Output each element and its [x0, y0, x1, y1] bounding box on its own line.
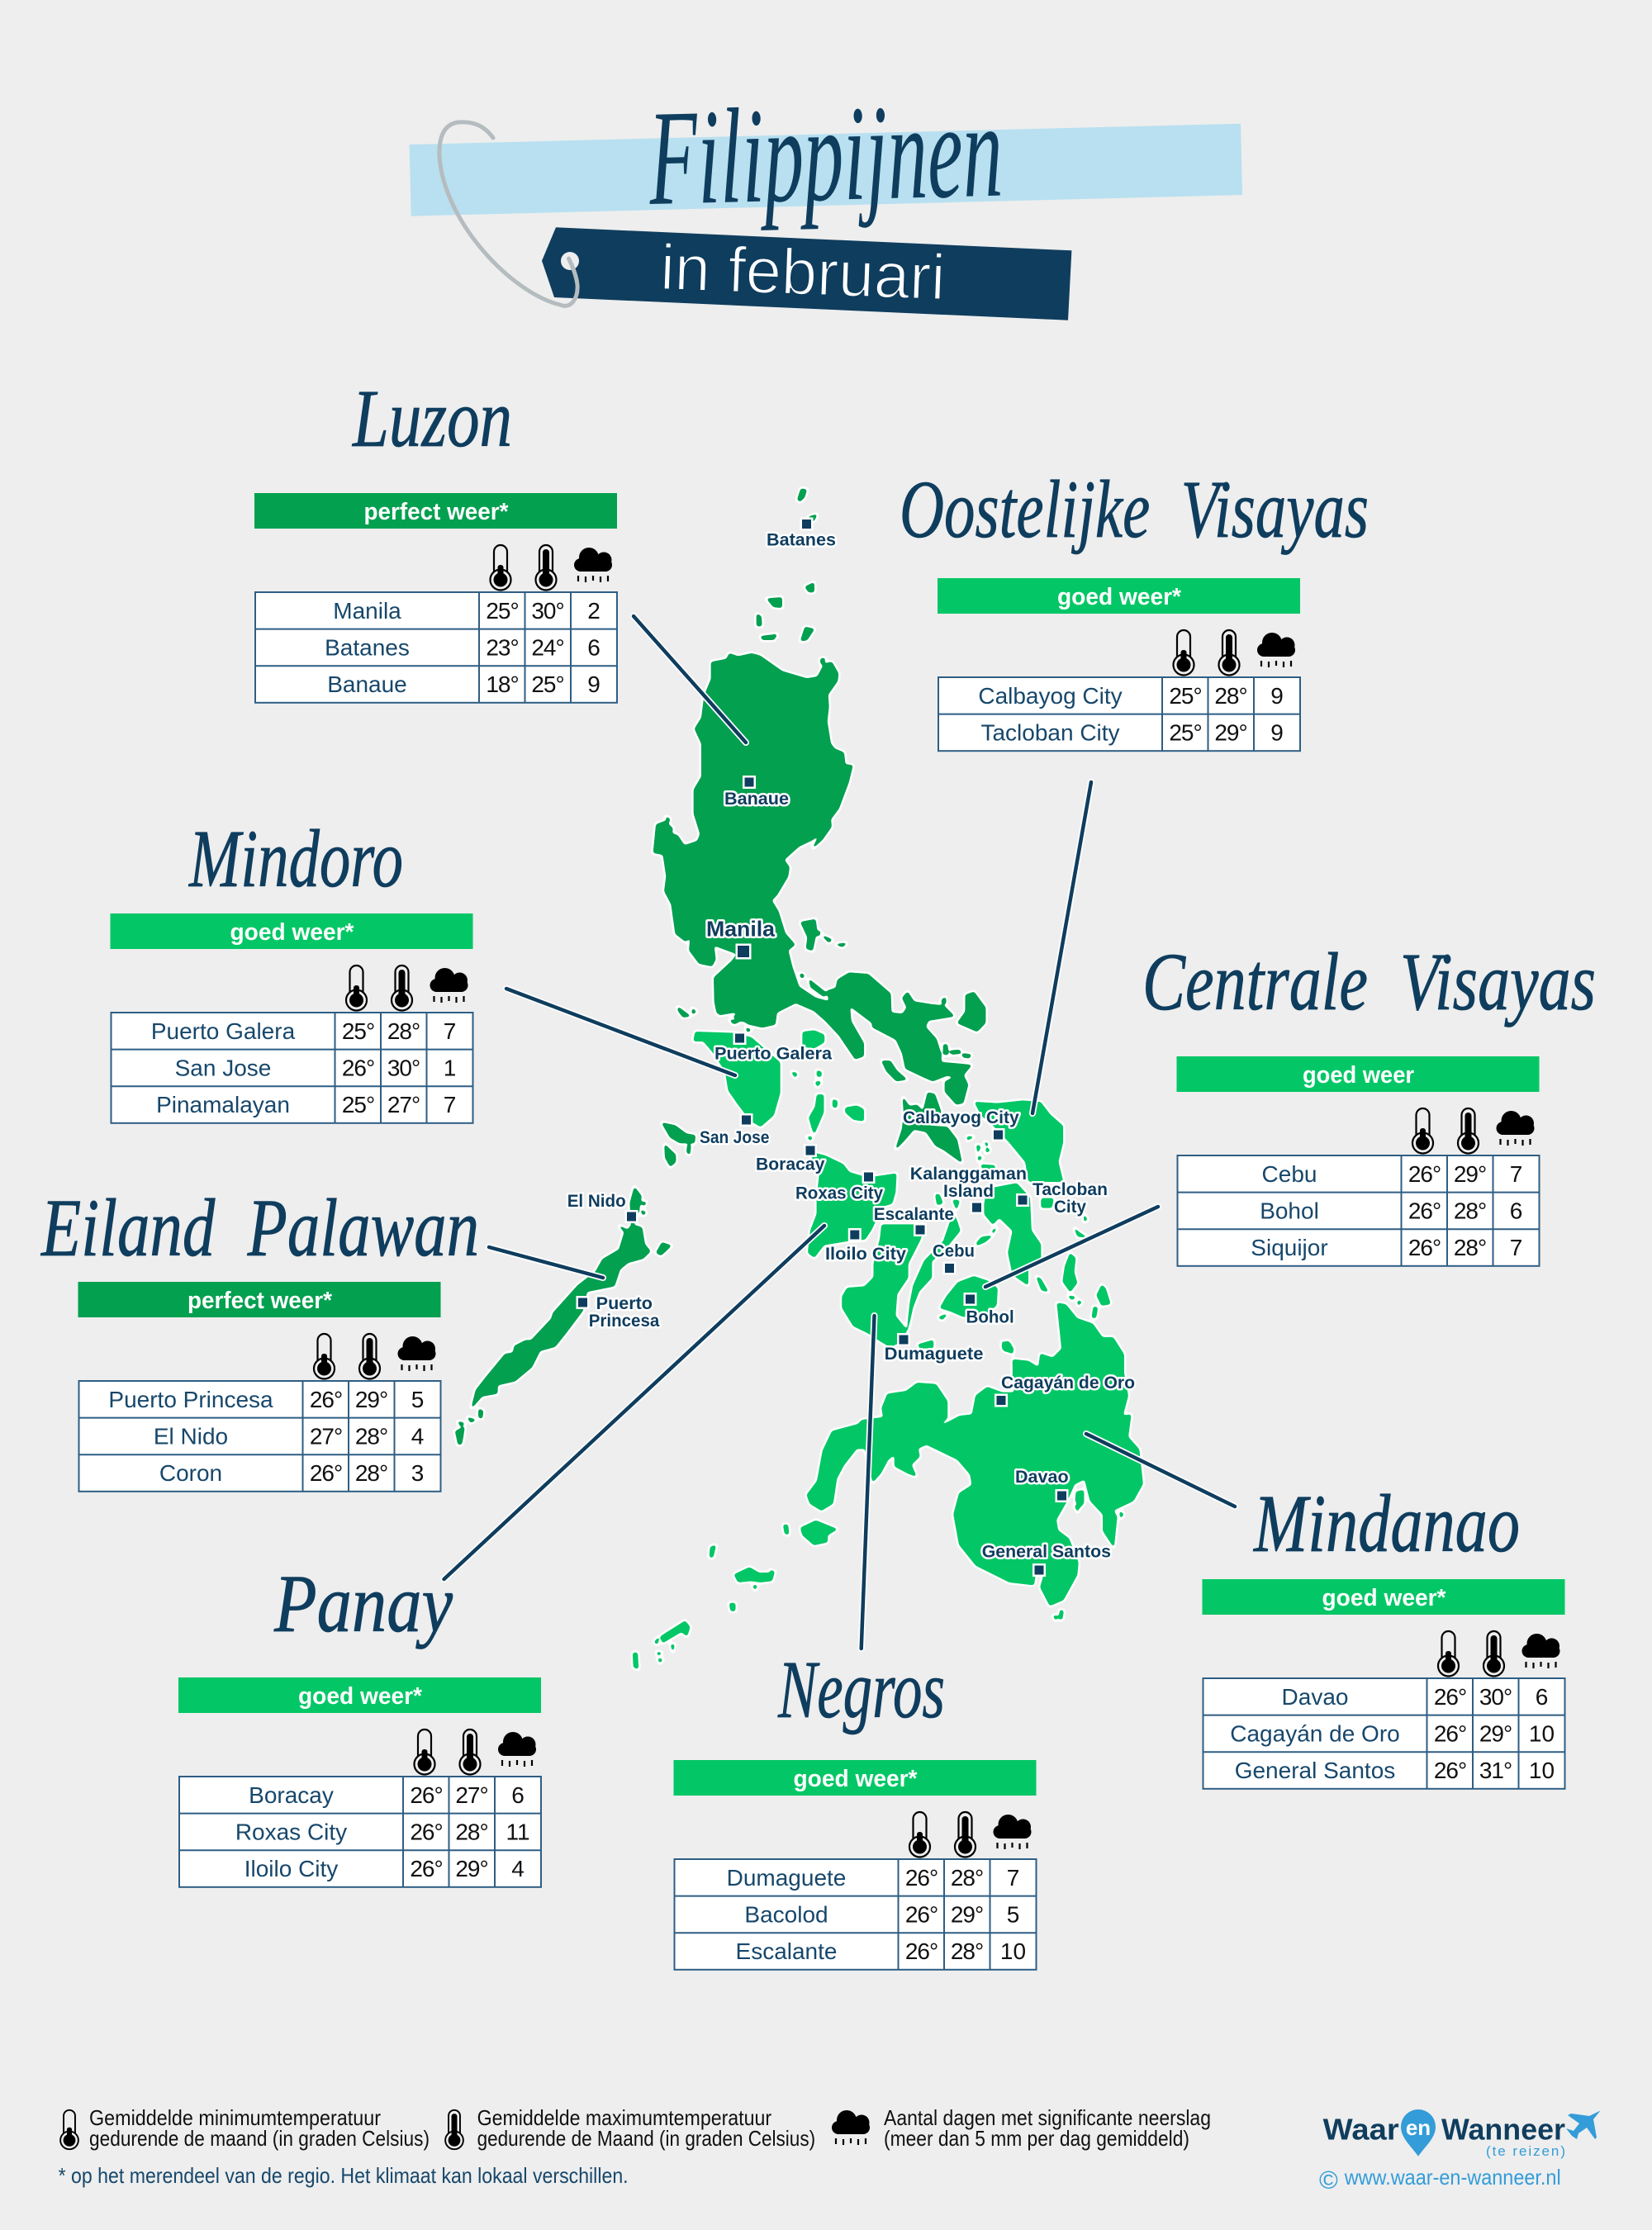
tag hole [561, 252, 579, 270]
city labels: Batanes [767, 530, 836, 550]
city labels: Tacloban [1032, 1179, 1108, 1199]
panel: Negros: Escalante [736, 1938, 837, 1964]
panel: Luzon: 25° [486, 598, 519, 624]
tag string [439, 122, 577, 306]
city labels: El Nido [567, 1191, 626, 1211]
panel: Mindoro: 7 [444, 1092, 456, 1117]
legend text: minimum temperature: Gemiddelde minimumtemperatuur [89, 2105, 381, 2130]
panel: Negros [674, 1760, 1036, 1970]
panel: Panay: 6 [511, 1782, 525, 1808]
city labels: Island [943, 1181, 994, 1201]
logo: Waar en Wanneer: Wanneer [1441, 2113, 1565, 2147]
panel: Centrale Visayas: Bohol [1260, 1198, 1319, 1224]
heading: Negros: Negros [777, 1644, 945, 1735]
panel: Mindanao: 26° [1434, 1684, 1466, 1710]
panel: Mindoro: goed weer* [230, 919, 354, 946]
panel: Mindanao: 31° [1479, 1758, 1512, 1783]
panel: Mindoro: 25° [342, 1018, 374, 1044]
legend text: rain days [884, 2105, 1211, 2151]
panel: Negros: 28° [951, 1938, 983, 1964]
panel: Centrale Visayas: 29° [1454, 1161, 1486, 1187]
panel: Oostelijke Visayas: 28° [1214, 683, 1247, 709]
city labels: San Jose [700, 1127, 770, 1147]
panel: Luzon: perfect weer* [363, 499, 509, 525]
city labels: Iloilo City [825, 1244, 906, 1264]
title block [410, 74, 1242, 320]
panel: Mindanao: 6 [1536, 1684, 1548, 1710]
legend text: maximum temperature: Gemiddelde maximumtemperatuur [477, 2105, 771, 2130]
panel: Oostelijke Visayas: 25° [1169, 683, 1202, 709]
panel: Negros: Dumaguete [727, 1865, 846, 1891]
panel: Panay: 26° [410, 1820, 443, 1845]
panel: Mindoro: 27° [387, 1092, 420, 1117]
panel: Centrale Visayas: 26° [1408, 1198, 1441, 1224]
panel: Negros: 26° [905, 1902, 938, 1928]
logo: Waar en Wanneer: Waar [1323, 2113, 1399, 2147]
logo: Waar en Wanneer [1319, 2109, 1601, 2194]
panel: Negros: Bacolod [744, 1902, 828, 1928]
panel: Mindoro: 30° [387, 1056, 420, 1081]
panel: Centrale Visayas: 26° [1408, 1161, 1441, 1187]
panel: Eiland Palawan: 26° [310, 1387, 342, 1412]
city labels: Manila [706, 916, 776, 941]
panel: Oostelijke Visayas [938, 578, 1300, 751]
panel: Eiland Palawan: 28° [355, 1424, 387, 1450]
logo: Waar en Wanneer: (te reizen) [1486, 2143, 1565, 2159]
panel: Luzon: 2 [587, 598, 601, 624]
city labels: General Santos [982, 1542, 1111, 1562]
panel: Luzon: Banaue [327, 671, 407, 697]
city labels: Roxas City [795, 1184, 883, 1203]
connector lines [444, 616, 1235, 1649]
footnote: * op het merendeel van de regio. Het klimaat kan lokaal verschillen. [59, 2163, 629, 2188]
panel: Negros: 28° [951, 1865, 983, 1891]
city labels: Puerto [596, 1293, 653, 1313]
panel: Mindoro: Pinamalayan [156, 1092, 290, 1117]
panel: Negros: 29° [951, 1902, 983, 1928]
panel: Luzon: 6 [587, 635, 601, 661]
panel: Centrale Visayas: Cebu [1262, 1161, 1317, 1187]
panel: Mindanao [1203, 1579, 1564, 1789]
panel: Mindoro: 26° [342, 1056, 374, 1081]
panel: Eiland Palawan: 3 [411, 1460, 424, 1486]
panel: Eiland Palawan: 28° [355, 1460, 387, 1486]
icon: location pin [1401, 2109, 1436, 2156]
panel: Oostelijke Visayas: 9 [1270, 720, 1284, 746]
city labels: Banaue [724, 789, 789, 809]
panel: Negros: 26° [905, 1938, 938, 1964]
panel: Eiland Palawan: 29° [355, 1387, 387, 1412]
panel: Centrale Visayas: 6 [1510, 1198, 1522, 1224]
city labels: Davao [1015, 1467, 1069, 1487]
panel: Mindanao: 10 [1529, 1758, 1555, 1783]
panel: Negros: 26° [905, 1865, 938, 1891]
heading: Mindoro: Mindoro [188, 813, 403, 904]
heading: Panay: Panay [273, 1558, 453, 1649]
panel: Panay [178, 1677, 541, 1887]
heading: Eiland Palawan: Eiland Palawan [40, 1182, 479, 1274]
panel: Mindoro: 1 [444, 1056, 456, 1081]
panel: Mindoro: 7 [444, 1018, 456, 1044]
panel: Luzon [254, 493, 617, 703]
heading: Mindanao: Mindanao [1252, 1478, 1520, 1569]
legend text: minimum temperature: gedurende de maand (in graden Celsius) [89, 2126, 430, 2151]
panel: Centrale Visayas: goed weer [1303, 1062, 1414, 1089]
panel: Centrale Visayas: 7 [1510, 1161, 1522, 1187]
city labels: Calbayog City [903, 1108, 1019, 1127]
heading: Oostelijke Visayas: Oostelijke Visayas [900, 463, 1369, 555]
panel: Panay: Roxas City [235, 1820, 347, 1845]
city labels: Cagayán de Oro [1001, 1373, 1135, 1393]
city labels: Bohol [966, 1307, 1014, 1327]
panel: Mindanao: 26° [1434, 1721, 1466, 1747]
panel: Panay: 26° [410, 1856, 443, 1881]
panel: Luzon: Manila [333, 598, 401, 624]
legend text: rain days: Aantal dagen met significante neerslag [884, 2105, 1211, 2130]
panel: Centrale Visayas [1176, 1056, 1540, 1266]
panel: Panay: goed weer* [298, 1683, 423, 1710]
map of the Philippines [456, 489, 1142, 1668]
panel: Mindanao: goed weer* [1322, 1585, 1446, 1611]
panel: Oostelijke Visayas: 9 [1270, 683, 1284, 709]
panel: Mindanao: 10 [1529, 1721, 1555, 1747]
panel: Centrale Visayas: 28° [1454, 1235, 1486, 1260]
panel: Luzon: 25° [531, 671, 564, 697]
city labels [567, 530, 1135, 1562]
logo: Waar en Wanneer: © [1319, 2166, 1338, 2194]
panel: Luzon: 18° [486, 671, 519, 697]
panel: Negros: 10 [1000, 1938, 1026, 1964]
legend text: rain days: (meer dan 5 mm per dag gemiddeld) [884, 2126, 1189, 2151]
panel: Panay: 27° [455, 1782, 488, 1808]
city labels: Cebu [933, 1241, 975, 1261]
panel: Centrale Visayas: 28° [1454, 1198, 1486, 1224]
panel: Eiland Palawan [78, 1282, 441, 1492]
panel: Luzon: 9 [587, 671, 601, 697]
panel: Negros: goed weer* [793, 1766, 918, 1792]
panel: Luzon: 24° [531, 635, 564, 661]
icon: rain cloud [832, 2110, 870, 2145]
icon: maximum temperature [445, 2110, 463, 2149]
legend text: maximum temperature [477, 2105, 815, 2151]
logo: Waar en Wanneer: www.waar-en-wanneer.nl [1344, 2165, 1561, 2190]
panel: Centrale Visayas: 7 [1510, 1235, 1522, 1260]
legend [60, 2105, 1211, 2151]
panel: Eiland Palawan: El Nido [154, 1424, 228, 1450]
panel: Mindanao: Cagayán de Oro [1230, 1721, 1400, 1747]
panel: Centrale Visayas: Siquijor [1251, 1235, 1328, 1260]
panel: Panay: Boracay [249, 1782, 334, 1808]
panel: Mindanao: General Santos [1235, 1758, 1395, 1783]
city markers [578, 520, 1066, 1574]
panel: Luzon: 23° [486, 635, 519, 661]
title banner: light blue [410, 124, 1242, 216]
panel: Mindoro: San Jose [175, 1056, 271, 1081]
panel: Mindoro: Puerto Galera [151, 1018, 296, 1044]
subheading: in februari: in februari [659, 230, 947, 314]
panel: Panay: Iloilo City [244, 1856, 338, 1881]
city labels: Kalanggaman [910, 1164, 1027, 1184]
city labels: Puerto Galera [714, 1044, 833, 1064]
panel: Oostelijke Visayas: Calbayog City [978, 683, 1123, 709]
luggage tag: navy [542, 227, 1071, 320]
logo: Waar en Wanneer: en [1406, 2115, 1431, 2140]
panel: Mindanao: Davao [1282, 1684, 1348, 1710]
panel: Eiland Palawan: Coron [159, 1460, 222, 1486]
panel: Mindoro [111, 913, 472, 1123]
panel: Eiland Palawan: perfect weer* [188, 1288, 333, 1314]
icon: minimum temperature [60, 2110, 78, 2149]
panel: Oostelijke Visayas: goed weer* [1057, 584, 1182, 610]
heading: Luzon: Luzon [351, 372, 512, 464]
city labels: Princesa [589, 1311, 660, 1331]
panel: Negros: 7 [1007, 1865, 1019, 1891]
panel: Oostelijke Visayas: 29° [1214, 720, 1247, 746]
panel: Oostelijke Visayas: 25° [1169, 720, 1202, 746]
panel: Panay: 11 [506, 1820, 530, 1845]
panel: Mindanao: 29° [1479, 1721, 1512, 1747]
panel: Eiland Palawan: 26° [310, 1460, 342, 1486]
panel: Mindoro: 25° [342, 1092, 374, 1117]
panel: Panay: 29° [455, 1856, 488, 1881]
panel: Panay: 28° [455, 1820, 488, 1845]
city labels: Dumaguete [885, 1344, 984, 1364]
panel: Mindanao: 26° [1434, 1758, 1466, 1783]
city labels: City [1054, 1197, 1086, 1217]
panel: Luzon: 30° [531, 598, 564, 624]
panel: Mindanao: 30° [1479, 1684, 1512, 1710]
panel: Negros: 5 [1007, 1902, 1019, 1928]
panel: Panay: 26° [410, 1782, 443, 1808]
city labels: Escalante [874, 1204, 954, 1224]
city labels: Boracay [756, 1155, 824, 1174]
panel: Eiland Palawan: 27° [310, 1424, 342, 1450]
legend text: maximum temperature: gedurende de Maand (in graden Celsius) [477, 2126, 815, 2151]
panel: Panay: 4 [511, 1856, 525, 1881]
panel: Eiland Palawan: 4 [411, 1424, 424, 1450]
legend text: minimum temperature [89, 2105, 430, 2151]
panel: Luzon: Batanes [325, 635, 410, 661]
panel: Centrale Visayas: 26° [1408, 1235, 1441, 1260]
heading: Filippijnen: Filippijnen [647, 74, 1004, 234]
panel: Mindoro: 28° [387, 1018, 420, 1044]
panel: Eiland Palawan: 5 [411, 1387, 424, 1412]
icon: airplane [1566, 2111, 1601, 2139]
panel: Eiland Palawan: Puerto Princesa [108, 1387, 273, 1412]
panel: Oostelijke Visayas: Tacloban City [980, 720, 1120, 746]
